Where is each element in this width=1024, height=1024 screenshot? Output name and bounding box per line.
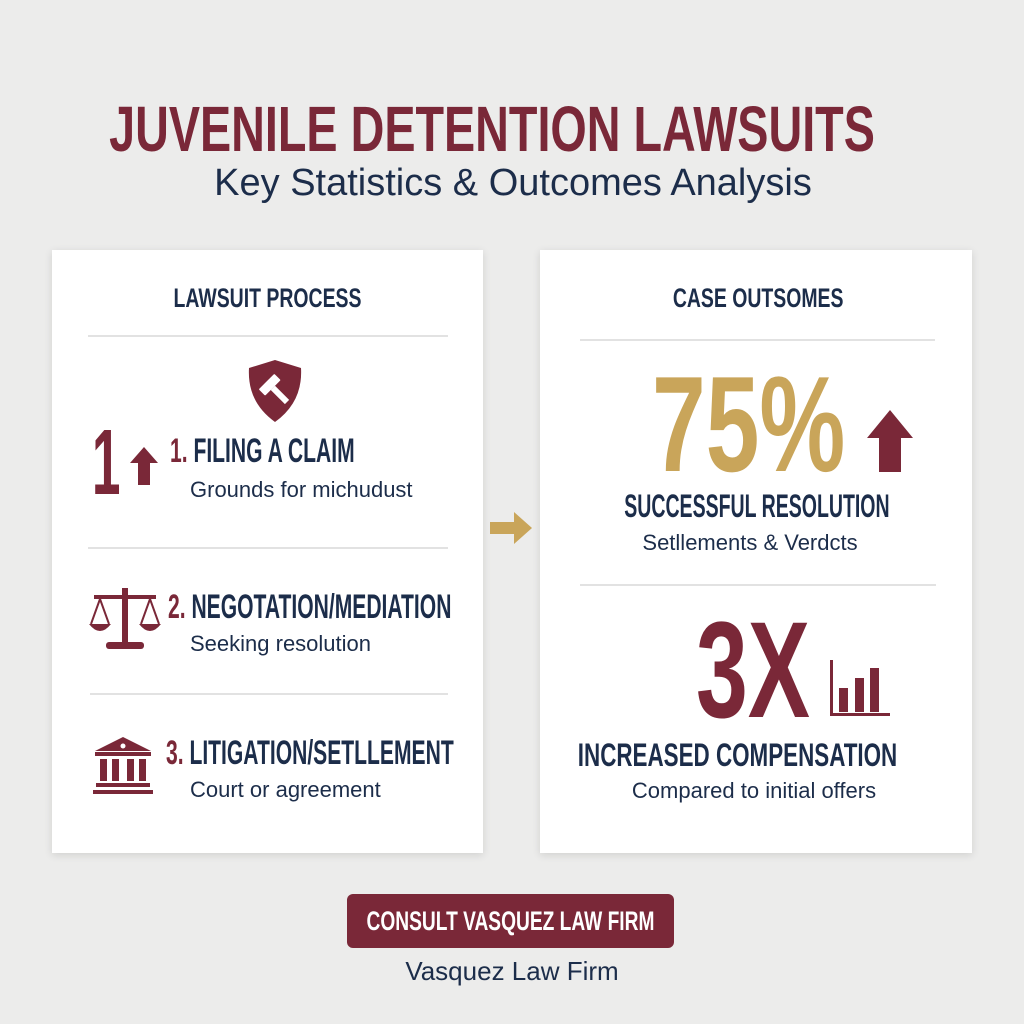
- icon: bar chart: [830, 660, 890, 716]
- step 3: [166, 734, 454, 802]
- label: successful resolution: Setllements & Verdcts: [642, 530, 858, 555]
- icon: scales: [89, 588, 161, 649]
- icon: up arrow: [867, 410, 913, 472]
- step 1: Grounds for michudust: [190, 477, 413, 502]
- panel heading: LAWSUIT PROCESS: [174, 283, 361, 313]
- label: successful resolution: [624, 488, 890, 555]
- step 2: [168, 588, 451, 656]
- step 1: 1. FILING A CLAIM: [170, 432, 355, 470]
- icon: shield gavel: [248, 360, 302, 422]
- label: increased compensation: Compared to initial offers: [632, 778, 876, 803]
- title: JUVENILE DETENTION LAWSUITS: [109, 93, 875, 165]
- arrow between panels: [490, 512, 532, 544]
- panel: lawsuit process: [52, 250, 483, 853]
- big number 1 with arrow: 1: [92, 410, 120, 514]
- step 2: 2. NEGOTATION/MEDIATION: [168, 588, 451, 626]
- step 2: Seeking resolution: [190, 631, 371, 656]
- label: increased compensation: INCREASED COMPENSATION: [578, 737, 897, 773]
- stat: 3X: [696, 594, 890, 747]
- step 1: [170, 432, 413, 502]
- stat: 3X: 3X: [696, 594, 810, 747]
- panel heading: CASE OUTSOMES: [673, 283, 843, 313]
- panel: case outcomes: [540, 250, 972, 853]
- footer firm name: Vasquez Law Firm: [405, 956, 619, 986]
- big number 1 with arrow: [92, 410, 158, 514]
- icon: courthouse: [93, 737, 153, 794]
- stat: 75%: 75%: [652, 348, 845, 500]
- label: increased compensation: [578, 737, 897, 803]
- step 3: 3. LITIGATION/SETLLEMENT: [166, 734, 454, 772]
- step 3: Court or agreement: [190, 777, 381, 802]
- button: consult: CONSULT VASQUEZ LAW FIRM: [367, 906, 654, 936]
- subtitle: Key Statistics & Outcomes Analysis: [214, 162, 812, 204]
- label: successful resolution: SUCCESSFUL RESOLUTION: [624, 488, 890, 524]
- button: consult: [347, 894, 674, 948]
